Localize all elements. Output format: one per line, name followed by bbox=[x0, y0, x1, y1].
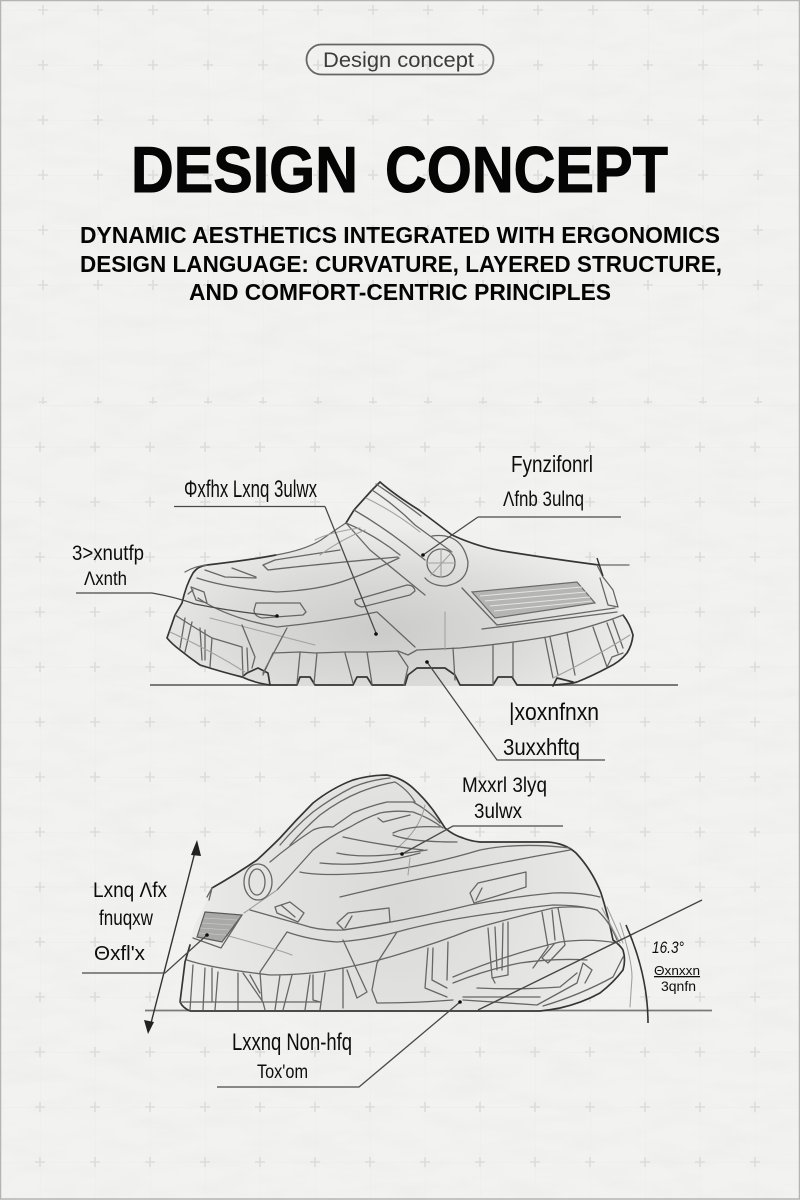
strap bbox=[346, 482, 629, 595]
subtitle text block bbox=[80, 222, 722, 305]
sketch: three-quarter rear view of clog bbox=[82, 774, 712, 1087]
title bbox=[131, 134, 668, 207]
title: CONCEPT bbox=[385, 134, 668, 207]
slots bbox=[188, 558, 618, 618]
callout: upper left: Φxfhx Lxnq 3ulwx bbox=[184, 476, 317, 503]
sole lugs bbox=[170, 612, 630, 685]
callout: heel: Θxfl'x bbox=[94, 943, 145, 965]
upper contour lines bbox=[175, 528, 623, 655]
outer outline bbox=[167, 615, 633, 685]
callout: angle value bbox=[652, 938, 700, 994]
callout: sole bbox=[425, 660, 605, 760]
callout: functional strap: Fynzifonrl bbox=[511, 451, 593, 477]
strap pivot bbox=[425, 536, 468, 586]
shoe upper and sole shading bbox=[167, 482, 633, 686]
callout: angle value: Θxnxxn bbox=[654, 963, 700, 978]
callout: sole: |xoxnfnxn bbox=[509, 699, 599, 726]
callout: toe bbox=[72, 542, 279, 618]
callout: angle value: 16.3° bbox=[652, 938, 684, 957]
subtitle text block: DESIGN LANGUAGE: CURVATURE, LAYERED STRUCTURE, bbox=[80, 251, 722, 277]
callout: mid strap bbox=[400, 774, 563, 856]
callout: angle value: 3qnfn bbox=[661, 978, 696, 994]
callout: toe: Λxnth bbox=[84, 569, 127, 590]
callout: mid strap: 3ulwx bbox=[474, 800, 522, 823]
tag: design concept pill bbox=[306, 44, 494, 74]
contour lines bbox=[187, 837, 617, 1000]
height arrow bbox=[144, 840, 201, 1034]
callout: outsole: Lxxnq Non-hfq bbox=[232, 1029, 352, 1056]
sole lugs bbox=[180, 907, 632, 1010]
callout: outsole bbox=[217, 1000, 462, 1087]
callout: heel: Lxnq Λfx bbox=[93, 879, 167, 902]
heel vent bbox=[193, 912, 242, 948]
title: DESIGN bbox=[131, 134, 358, 207]
callout: toe: 3>xnutfp bbox=[72, 542, 144, 565]
callout: outsole: Tox'om bbox=[257, 1062, 308, 1083]
ground line bbox=[150, 684, 678, 686]
subtitle text block: DYNAMIC AESTHETICS INTEGRATED WITH ERGONOMICS bbox=[80, 222, 720, 248]
callout: functional strap bbox=[421, 451, 621, 557]
callout: mid strap: Mxxrl 3lyq bbox=[462, 774, 547, 797]
ground line bbox=[145, 1010, 712, 1012]
tag: design concept pill: Design concept bbox=[323, 48, 474, 72]
angle line and arc bbox=[478, 900, 702, 1023]
callout: upper left bbox=[174, 476, 378, 636]
shoe shading bbox=[180, 775, 623, 1011]
callout: functional strap: Λfnb 3ulnq bbox=[503, 488, 584, 511]
strap bbox=[244, 778, 457, 913]
sketch: side view of clog bbox=[72, 451, 678, 760]
callout: heel bbox=[82, 879, 209, 973]
strap pivot bbox=[244, 864, 272, 900]
outer outline bbox=[180, 775, 624, 1011]
side vent bbox=[472, 582, 595, 618]
slots bbox=[275, 872, 526, 930]
callout: heel: fnuqxw bbox=[99, 907, 154, 930]
subtitle text block: AND COMFORT-CENTRIC PRINCIPLES bbox=[189, 279, 611, 305]
callout: sole: 3uxxhftq bbox=[503, 734, 580, 760]
